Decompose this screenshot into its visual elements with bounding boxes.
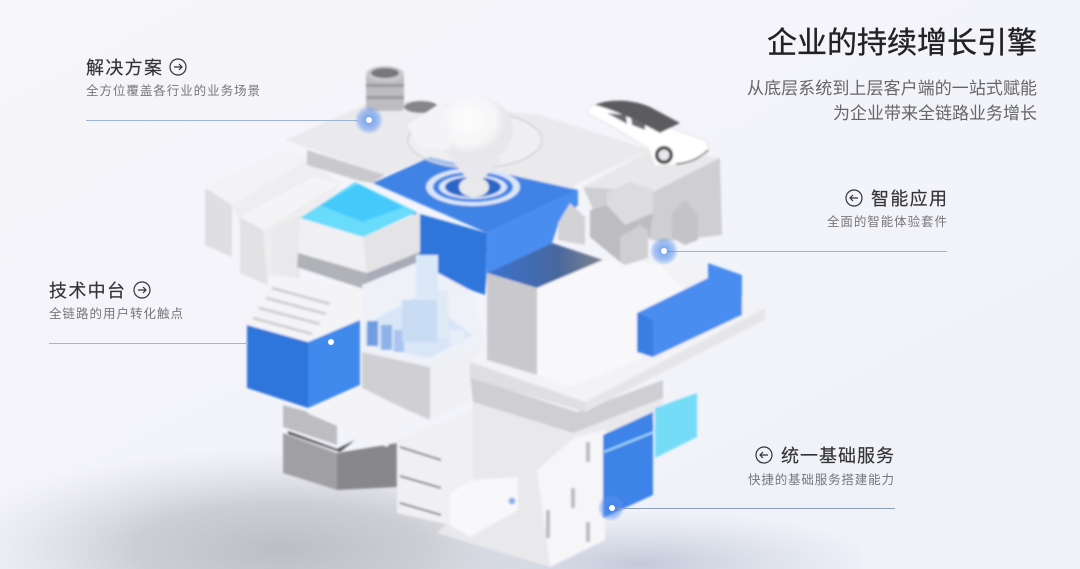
middle shelf bbox=[470, 250, 765, 412]
callout: 技术中台: 技术中台 bbox=[49, 281, 125, 301]
callout: 解决方案 bbox=[86, 58, 383, 134]
callout: 统一基础服务: 统一基础服务 bbox=[781, 446, 894, 466]
lower left pedestal bbox=[283, 405, 397, 490]
title: 企业的持续增长引擎 bbox=[767, 27, 1037, 60]
white tray bbox=[307, 387, 413, 447]
white stone cube with dark top bbox=[487, 243, 690, 387]
cyan glass panel bbox=[655, 393, 697, 458]
top platform bbox=[285, 98, 722, 242]
glass city block bbox=[362, 255, 487, 420]
blue wall block bbox=[637, 263, 742, 357]
isometric cube illustration bbox=[205, 66, 765, 567]
callout: 统一基础服务 bbox=[598, 446, 895, 521]
subtitle: 为企业带来全链路业务增长 bbox=[833, 104, 1037, 123]
icon: arrow left bbox=[846, 190, 862, 206]
subtitle: 从底层系统到上层客户端的一站式赋能 bbox=[747, 79, 1037, 98]
callout: 解决方案: 解决方案 bbox=[86, 58, 162, 78]
callout: 统一基础服务: 快捷的基础服务搭建能力 bbox=[748, 472, 894, 487]
database cylinder bbox=[366, 66, 438, 113]
car bbox=[587, 101, 708, 166]
icon: arrow left bbox=[756, 447, 772, 463]
icon: arrow right bbox=[170, 59, 186, 75]
callout: 技术中台: 全链路的用户转化触点 bbox=[49, 306, 183, 321]
callout: 智能应用: 智能应用 bbox=[871, 189, 947, 209]
blue stair cube bbox=[247, 275, 360, 408]
callout: 解决方案: 全方位覆盖各行业的业务场景 bbox=[86, 83, 260, 98]
icon: arrow right bbox=[134, 282, 150, 298]
small grey buildings bbox=[558, 182, 698, 265]
server rack bbox=[397, 410, 518, 537]
blue centre cube bbox=[373, 157, 578, 295]
callout: 智能应用: 全面的智能体验套件 bbox=[827, 214, 947, 229]
ring target bbox=[426, 168, 520, 206]
subtitle bbox=[747, 79, 1037, 123]
callout: 技术中台 bbox=[49, 281, 334, 345]
callout: 智能应用 bbox=[650, 189, 947, 265]
main lower cube bbox=[437, 377, 663, 567]
cyan block bbox=[297, 182, 420, 290]
blue door panel bbox=[603, 412, 654, 518]
globe on glass dish bbox=[407, 96, 542, 180]
side white towers bbox=[205, 150, 340, 285]
